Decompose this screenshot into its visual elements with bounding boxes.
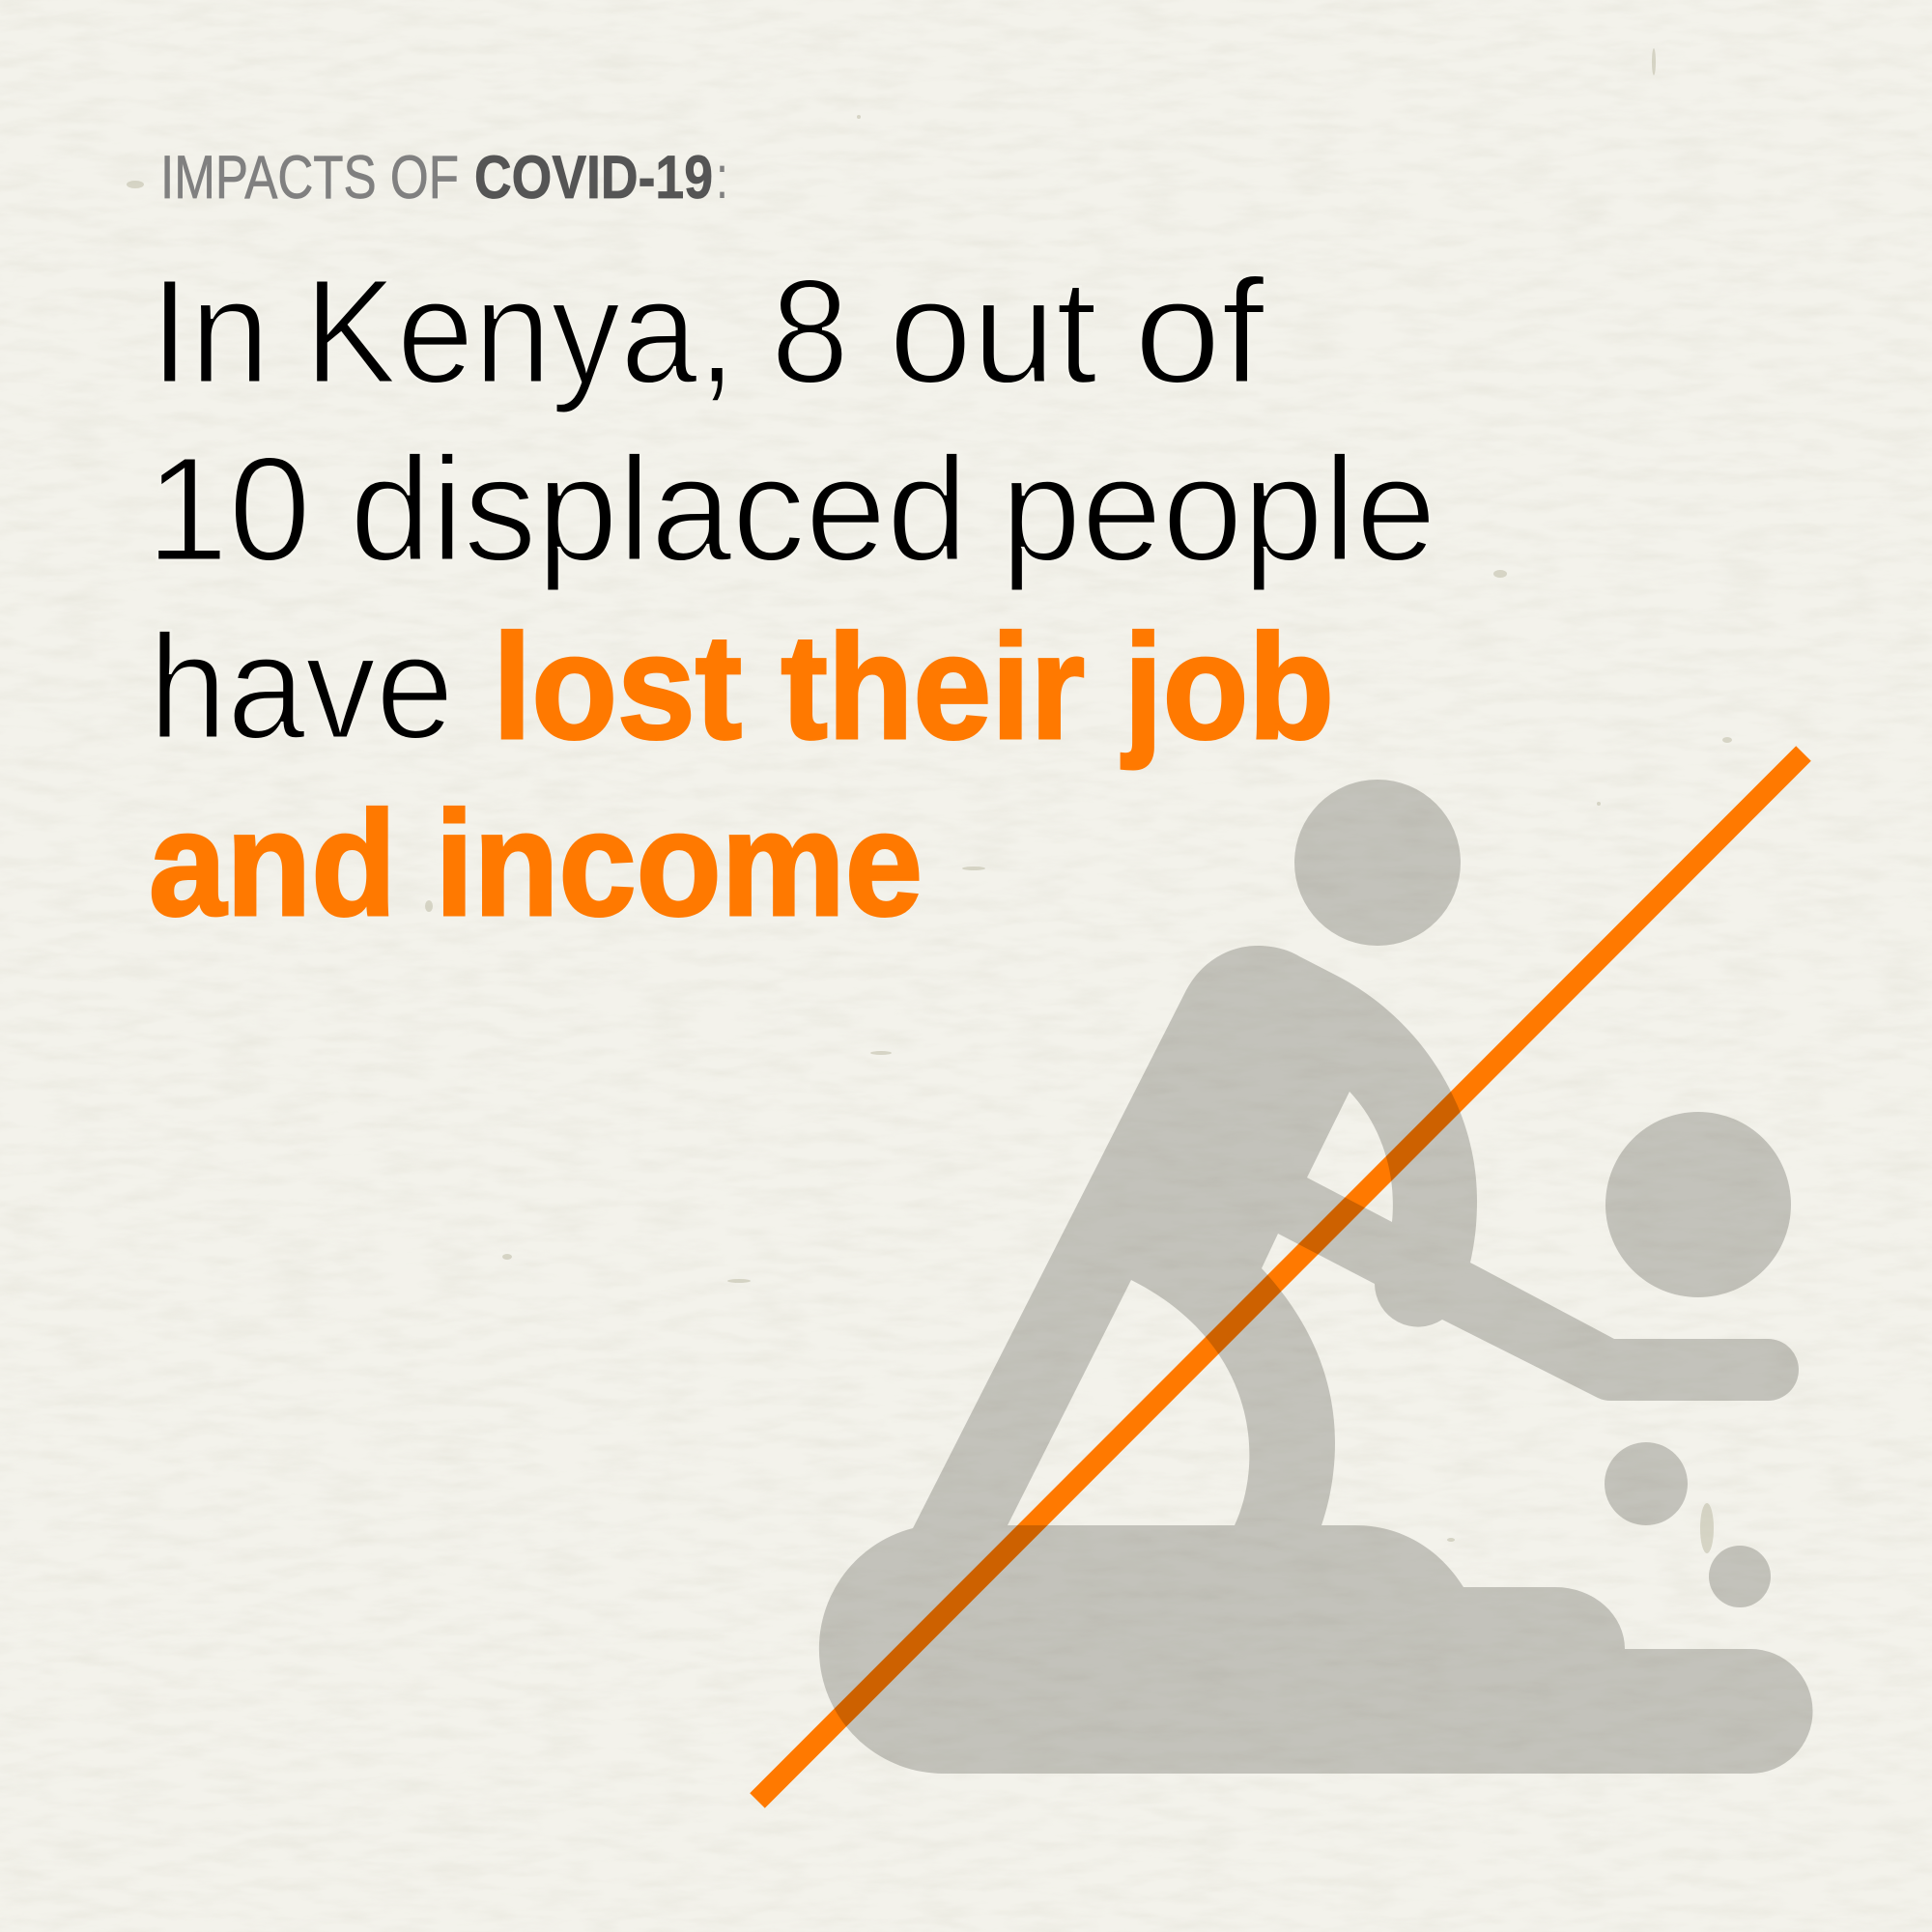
statement line 3: have: have — [149, 604, 454, 770]
statement line 1 — [150, 248, 1265, 414]
kicker heading — [160, 144, 728, 212]
main statement — [146, 248, 1436, 947]
statement line 1: of — [1134, 248, 1265, 414]
statement line 2: people — [1001, 426, 1436, 592]
statement line 2: displaced — [350, 426, 968, 592]
statement line 2 — [146, 426, 1436, 592]
icon: massage therapist and client — [819, 780, 1813, 1774]
statement line 1: out — [889, 248, 1097, 414]
smallest stone — [1709, 1546, 1771, 1607]
kicker: colon: : — [716, 144, 728, 212]
statement line 1: Kenya, — [304, 248, 736, 414]
small stone — [1605, 1442, 1688, 1525]
therapist head — [1294, 780, 1461, 946]
figure body and table — [819, 946, 1813, 1774]
client head — [1605, 1112, 1791, 1297]
kicker: covid-19: COVID-19 — [474, 144, 713, 212]
statement line 4: highlighted: and income — [149, 781, 923, 947]
kicker: impacts of: IMPACTS OF — [160, 144, 459, 212]
statement line 1: 8 — [771, 248, 849, 414]
statement line 1: In — [150, 248, 270, 414]
strike-through line — [757, 753, 1804, 1801]
statement line 2: 10 — [146, 426, 311, 592]
statement line 3: highlighted: lost their job — [493, 604, 1334, 770]
